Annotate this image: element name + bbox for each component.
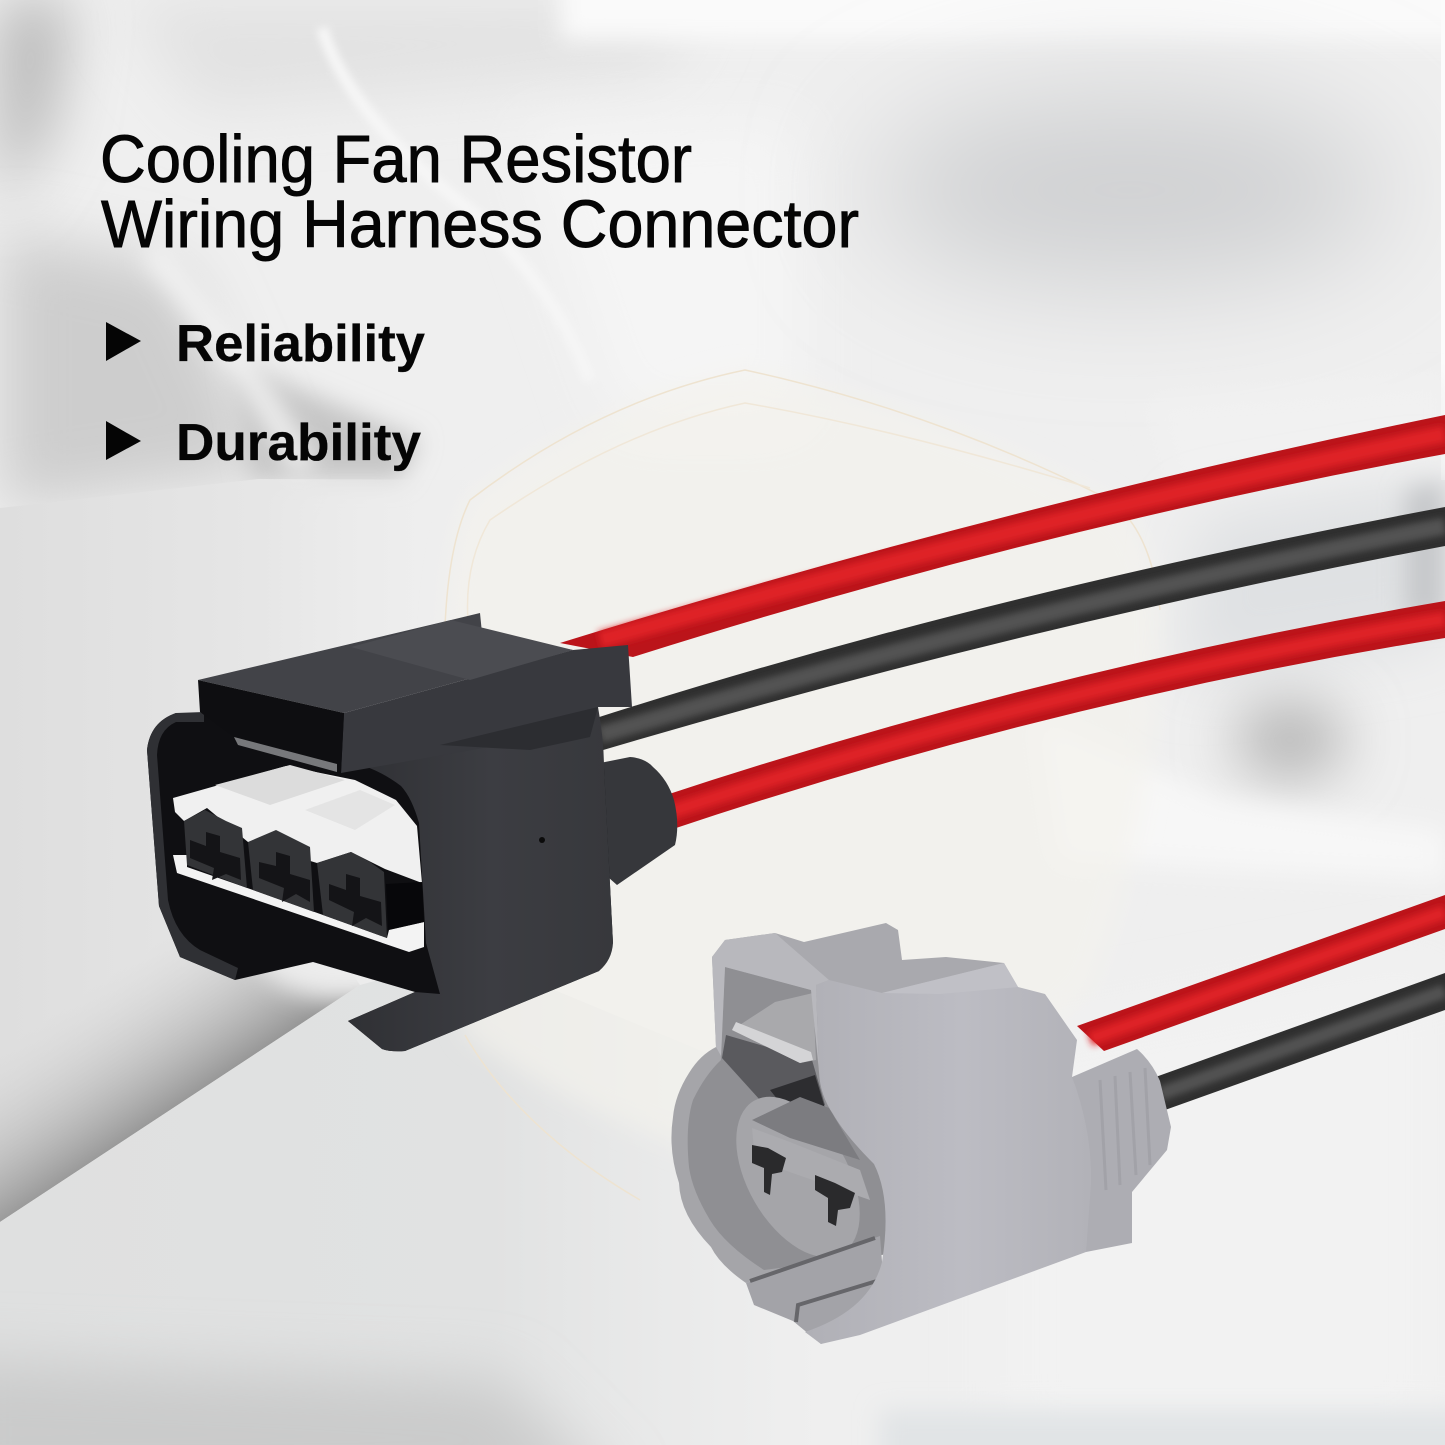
black 3-pin connector (147, 613, 677, 1051)
rim (147, 712, 238, 980)
black wire (590, 507, 1445, 753)
pin slot left (752, 1145, 786, 1195)
title (100, 122, 859, 262)
white insert top (173, 766, 422, 883)
wires of the black connector (560, 415, 1445, 830)
connector shell (147, 713, 613, 1051)
insert top recess (752, 1097, 860, 1160)
pin cavity 3 (317, 852, 387, 938)
bottom tabs (746, 1236, 885, 1344)
mould dot (539, 837, 545, 843)
rear neck (1070, 1049, 1171, 1252)
grey 2-pin connector (671, 923, 1171, 1344)
pin cavity 1 (184, 810, 247, 888)
rear stub (600, 757, 677, 885)
pin slots (190, 832, 382, 926)
top bar front (712, 933, 829, 1072)
latch opening (198, 680, 344, 773)
red wire (1077, 895, 1445, 1051)
latch strip (234, 737, 337, 772)
pin slot right (815, 1175, 855, 1226)
dark slot behind tab (722, 1035, 825, 1105)
red wire lower (660, 601, 1445, 830)
pin cavity 2 (248, 830, 314, 912)
rear top block (775, 923, 1010, 1010)
latch top face (198, 613, 573, 713)
insert face (711, 1076, 885, 1278)
black wire (1150, 973, 1445, 1110)
wires of the grey connector (1077, 895, 1445, 1110)
feature: durability: Durability (176, 414, 421, 472)
right pillar (344, 707, 613, 1051)
outer lip (671, 933, 870, 1283)
faint shield watermark (444, 370, 1160, 1200)
title: Wiring Harness Connector (101, 187, 859, 262)
feature: reliability: Reliability (176, 315, 425, 373)
latch tab (732, 993, 816, 1063)
black gap (386, 882, 424, 930)
main barrel (805, 963, 1091, 1344)
inner well (688, 967, 920, 1270)
tab slits (750, 1238, 880, 1322)
latch side (341, 645, 632, 773)
white strip lower (173, 855, 424, 952)
rear top ridge (882, 963, 1018, 994)
neck ribs (1100, 1068, 1150, 1190)
title: Cooling Fan Resistor (100, 122, 692, 197)
red wire upper (560, 415, 1445, 657)
latch shadow (440, 707, 598, 750)
